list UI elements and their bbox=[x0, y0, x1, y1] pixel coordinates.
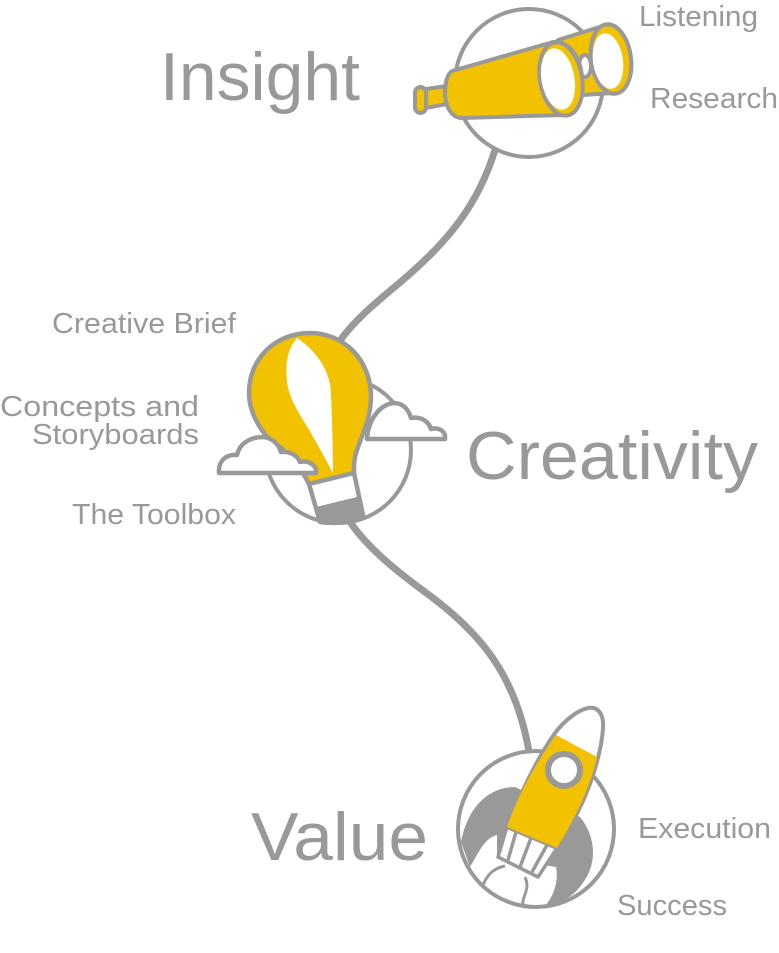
heading: Value: Value bbox=[251, 799, 428, 875]
label: Execution: Execution bbox=[638, 813, 771, 845]
label: Success: Success bbox=[617, 890, 727, 922]
heading: Insight: Insight bbox=[160, 39, 360, 115]
label: Research: Research bbox=[650, 83, 778, 115]
connector: creativity to value bbox=[350, 522, 529, 752]
icon: rocket bbox=[458, 708, 614, 907]
label: The Toolbox: The Toolbox bbox=[72, 499, 237, 531]
icon: binoculars bbox=[415, 9, 636, 157]
label: Concepts and: Concepts and bbox=[0, 391, 199, 423]
heading: Creativity: Creativity bbox=[466, 418, 758, 494]
label: Listening: Listening bbox=[639, 1, 758, 33]
label: Creative Brief: Creative Brief bbox=[52, 308, 237, 340]
connector: insight to creativity bbox=[339, 150, 495, 342]
icon: hot air balloon with clouds bbox=[219, 333, 445, 523]
label: Storyboards: Storyboards bbox=[32, 419, 199, 451]
